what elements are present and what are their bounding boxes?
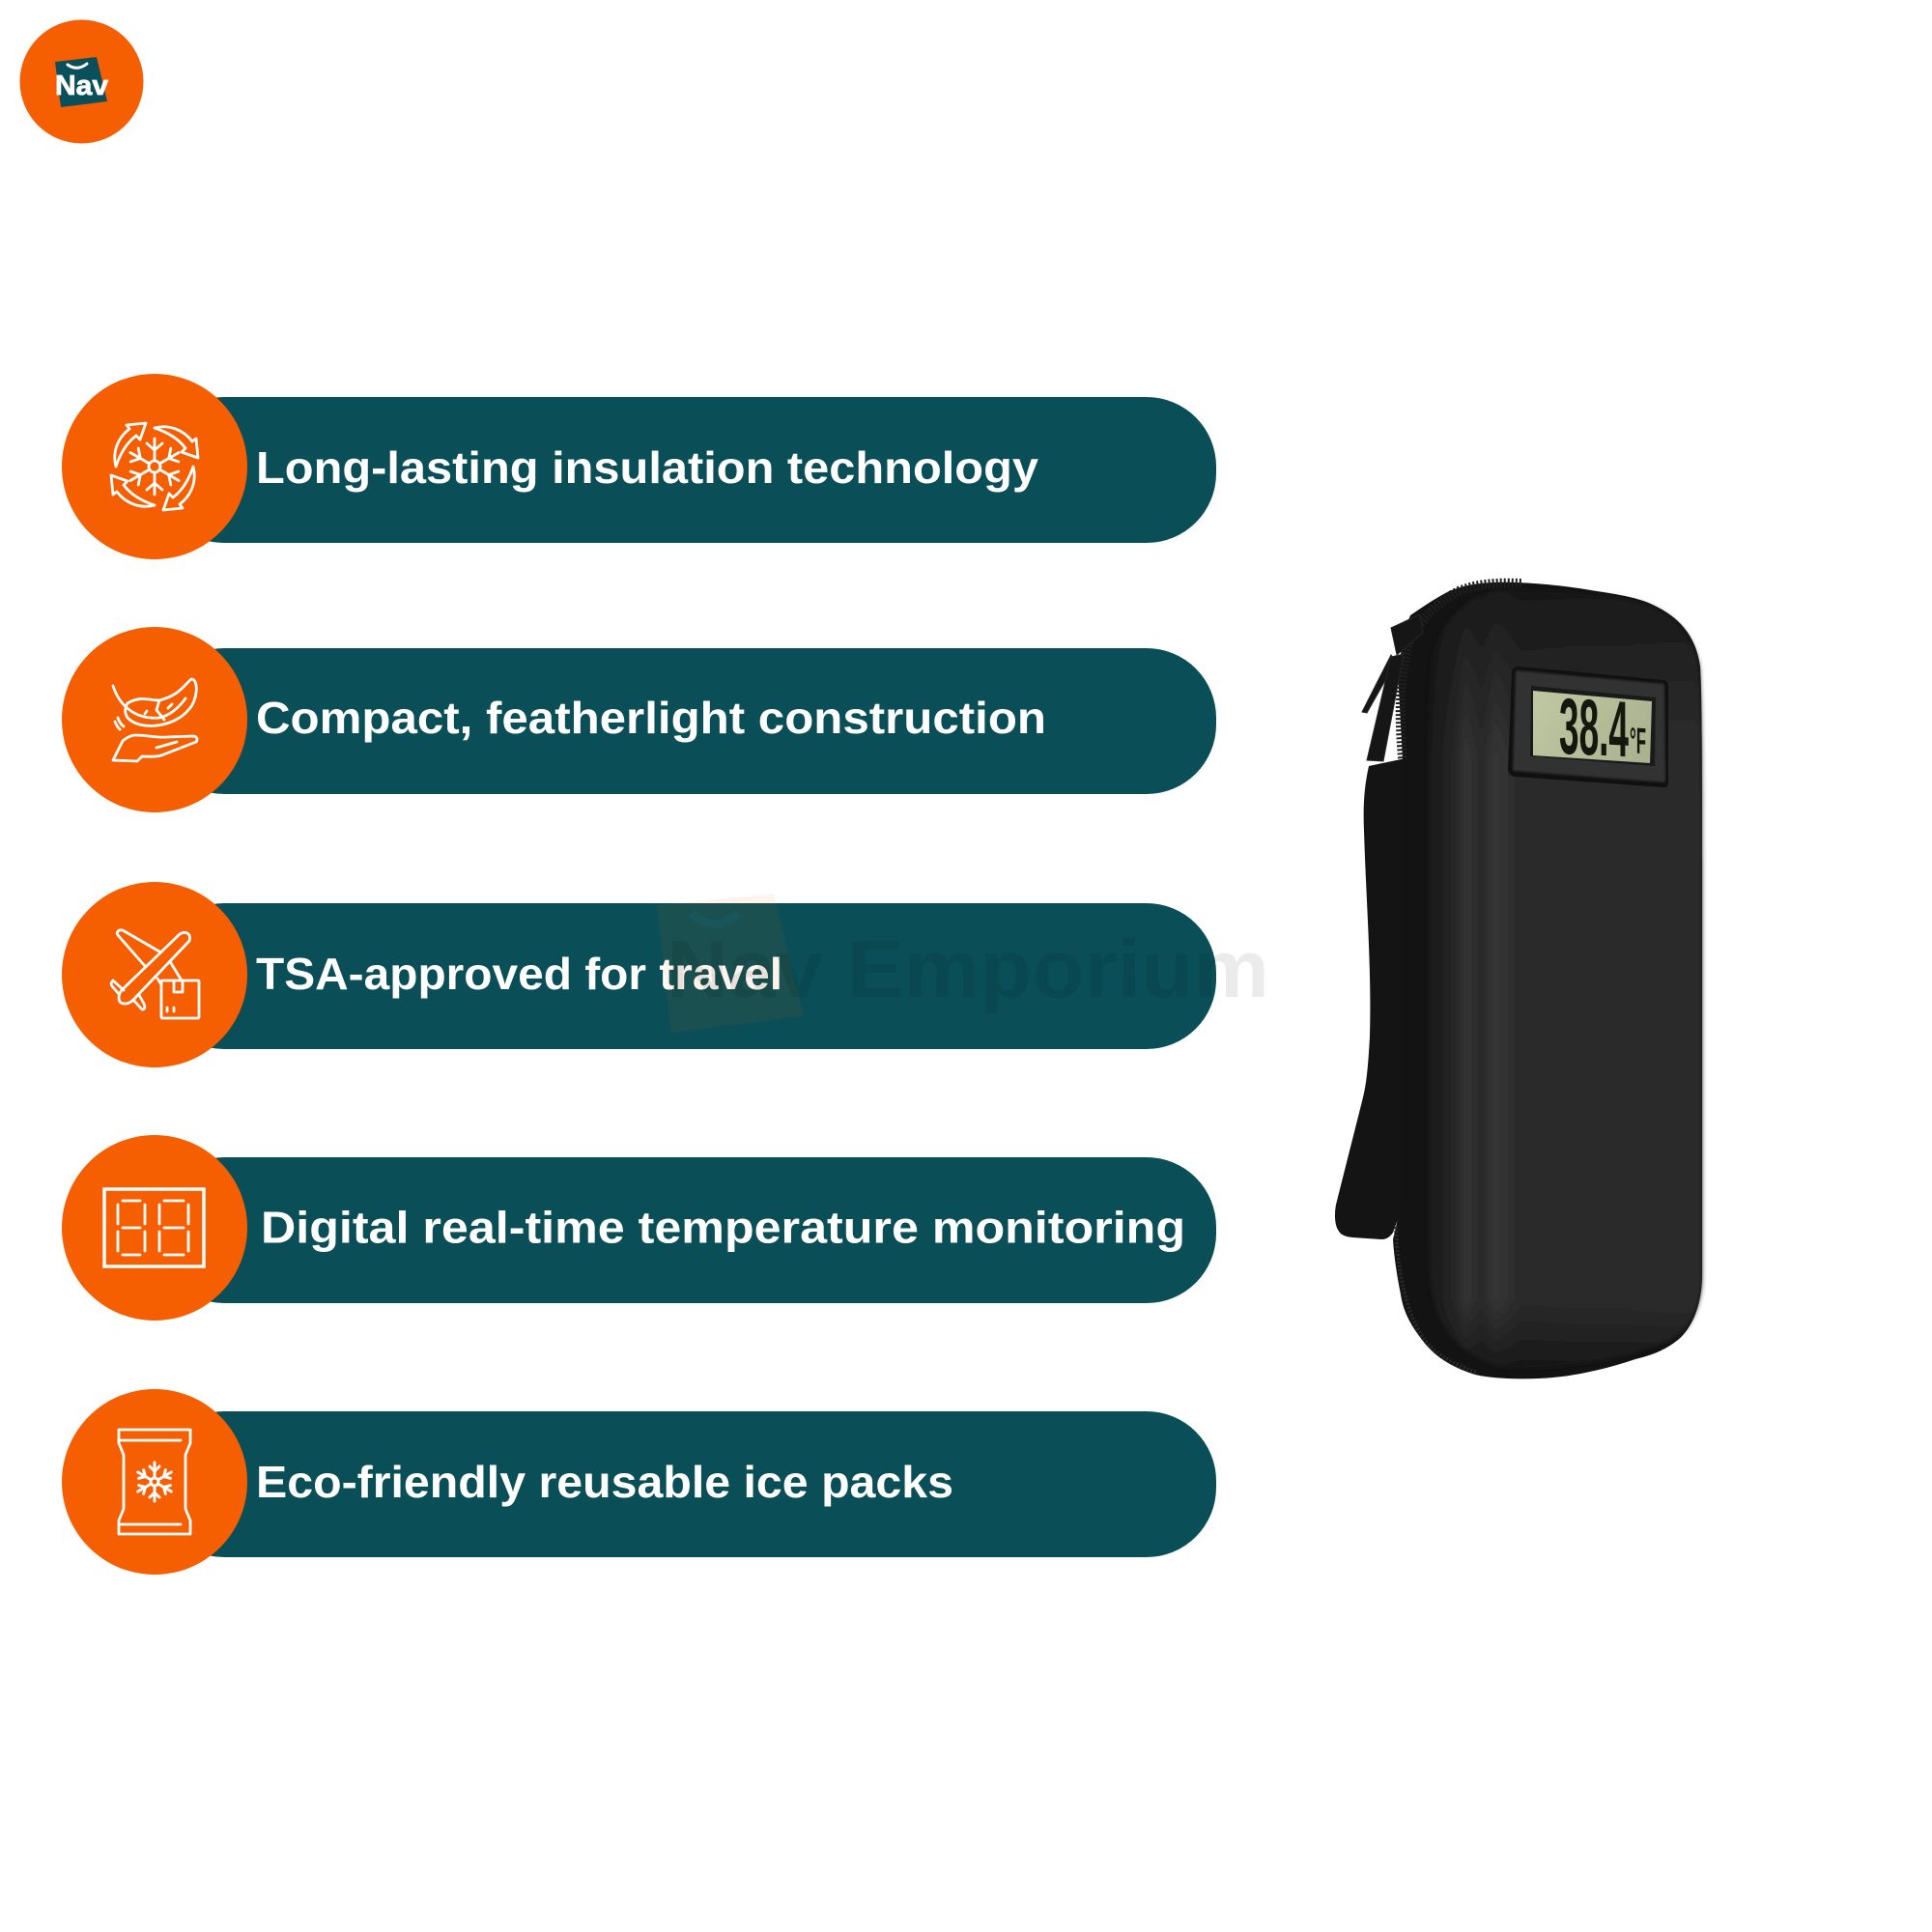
product: insulated case bbox=[1335, 582, 1702, 1378]
icon: snowflake with cycling arrows bbox=[111, 423, 198, 510]
label: travel: TSA-approved for travel bbox=[256, 949, 782, 999]
feature row 1: insulation bbox=[62, 374, 1216, 559]
front face bbox=[1428, 590, 1702, 1369]
icon: ice pack bbox=[119, 1430, 190, 1534]
label: featherlight: Compact, featherlight construction bbox=[256, 693, 1046, 743]
logo badge: Nav bbox=[55, 71, 108, 101]
icon: digital display bbox=[104, 1189, 204, 1266]
feature row 2: featherlight bbox=[62, 627, 1216, 812]
feature row 5: ice packs bbox=[62, 1389, 1216, 1575]
icon: feather over hand bbox=[113, 679, 197, 761]
zipper pull bbox=[1362, 614, 1423, 761]
zipper bbox=[1401, 583, 1521, 758]
temperature display bbox=[1508, 667, 1668, 787]
label: insulation: Long-lasting insulation technology bbox=[256, 442, 1038, 493]
watermark: Nav Emporium bbox=[667, 923, 1269, 1014]
strap bbox=[1335, 758, 1420, 1239]
icon: airplane with parcel bbox=[111, 930, 199, 1018]
label: ice packs: Eco-friendly reusable ice packs bbox=[256, 1457, 953, 1507]
temperature display: °F bbox=[1630, 721, 1646, 762]
logo badge bbox=[19, 19, 143, 143]
watermark bbox=[657, 894, 1269, 1033]
feature row 3: travel bbox=[62, 882, 1216, 1067]
feature row 4: temperature bbox=[62, 1135, 1216, 1321]
case shell bbox=[1393, 582, 1702, 1378]
temperature reading bbox=[1559, 683, 1646, 775]
temperature reading: 38.4 bbox=[1559, 683, 1629, 774]
label: temperature: Digital real-time temperature monitoring bbox=[261, 1202, 1185, 1252]
